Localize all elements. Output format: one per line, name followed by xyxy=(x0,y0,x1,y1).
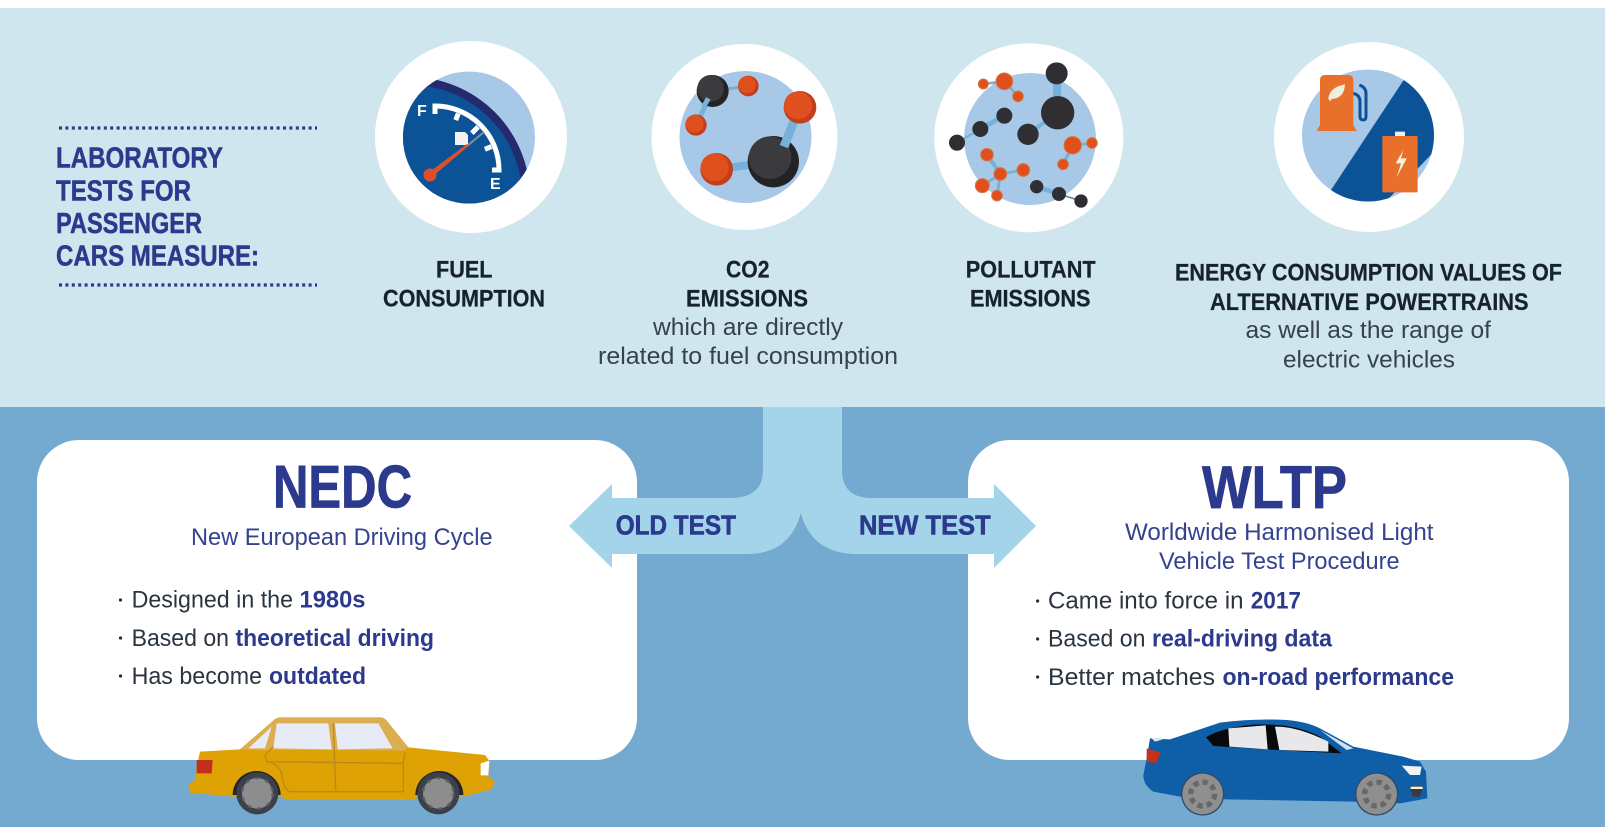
label: fuel consumption xyxy=(383,257,545,313)
subheading: Worldwide Harmonised Light Vehicle Test Procedure xyxy=(1125,519,1434,575)
arrow: split old and new test xyxy=(569,407,1036,568)
label: pollutant emissions: EMISSIONS xyxy=(970,286,1090,313)
heading: laboratory tests measure: TESTS FOR xyxy=(56,175,191,207)
label: energy consumption of alternative powertrains: ALTERNATIVE POWERTRAINS xyxy=(1210,289,1528,316)
card: NEDC xyxy=(37,440,637,760)
icon: blue new car xyxy=(1143,720,1427,816)
icon: fuel gauge: E xyxy=(490,176,501,193)
panel: laboratory tests xyxy=(0,8,1605,407)
bullet list: NEDC: 1980s xyxy=(300,587,366,614)
label: energy consumption of alternative powertrains: as well as the range of xyxy=(1246,317,1491,344)
heading: laboratory tests measure xyxy=(56,128,317,285)
label: CO2 emissions: related to fuel consumption xyxy=(598,343,898,370)
bullet list: NEDC: outdated xyxy=(269,663,366,690)
label: energy consumption of alternative powertrains xyxy=(1175,260,1562,374)
label: CO2 emissions: EMISSIONS xyxy=(686,286,808,313)
icon: fuel gauge xyxy=(375,41,567,233)
icon: pollutant molecules xyxy=(934,43,1123,232)
subheading: New European Driving Cycle: New European Driving Cycle xyxy=(191,524,493,551)
label: fuel consumption: CONSUMPTION xyxy=(383,286,545,313)
heading: laboratory tests measure: PASSENGER xyxy=(56,208,202,240)
bullet list: WLTP: 2017 xyxy=(1251,588,1301,615)
heading: laboratory tests measure: LABORATORY xyxy=(56,143,223,175)
label: energy consumption of alternative powertrains: electric vehicles xyxy=(1283,347,1455,374)
icon: fuel pump and battery xyxy=(1274,42,1464,232)
subheading: Worldwide Harmonised Light Vehicle Test Procedure: Vehicle Test Procedure xyxy=(1159,548,1400,575)
heading: NEDC: NEDC xyxy=(273,454,412,521)
bullet list: NEDC: theoretical driving xyxy=(236,625,434,652)
bullet list: NEDC: Has become xyxy=(132,663,262,690)
bullet list: NEDC xyxy=(119,587,434,690)
icon: yellow old car xyxy=(188,717,495,814)
label: fuel consumption: FUEL xyxy=(436,257,493,284)
label: pollutant emissions xyxy=(966,257,1096,313)
arrow label: old test: OLD TEST xyxy=(616,509,736,540)
bullet list: WLTP: on-road performance xyxy=(1222,664,1454,691)
bullet list: WLTP xyxy=(1036,588,1454,691)
card: WLTP xyxy=(968,440,1569,760)
icon: fuel gauge: F xyxy=(417,103,427,120)
label: CO2 emissions xyxy=(598,257,898,370)
label: CO2 emissions: CO2 xyxy=(726,257,770,284)
label: energy consumption of alternative powertrains: ENERGY CONSUMPTION VALUES OF xyxy=(1175,260,1562,287)
arrow label: new test: NEW TEST xyxy=(859,509,991,540)
bullet list: NEDC: Based on xyxy=(132,625,229,652)
bullet list: WLTP: Better matches xyxy=(1048,664,1215,691)
heading: WLTP: WLTP xyxy=(1202,454,1347,521)
label: CO2 emissions: which are directly xyxy=(652,314,844,341)
bullet list: WLTP: real-driving data xyxy=(1152,626,1332,653)
panel: test comparison xyxy=(0,407,1605,827)
label: pollutant emissions: POLLUTANT xyxy=(966,257,1096,284)
subheading: Worldwide Harmonised Light Vehicle Test Procedure: Worldwide Harmonised Light xyxy=(1125,519,1434,546)
bullet list: WLTP: Based on xyxy=(1048,626,1145,653)
heading: laboratory tests measure: CARS MEASURE: xyxy=(56,241,259,273)
bullet list: WLTP: Came into force in xyxy=(1048,588,1244,615)
bullet list: NEDC: Designed in the xyxy=(132,587,293,614)
icon: CO2 molecules xyxy=(652,44,838,230)
